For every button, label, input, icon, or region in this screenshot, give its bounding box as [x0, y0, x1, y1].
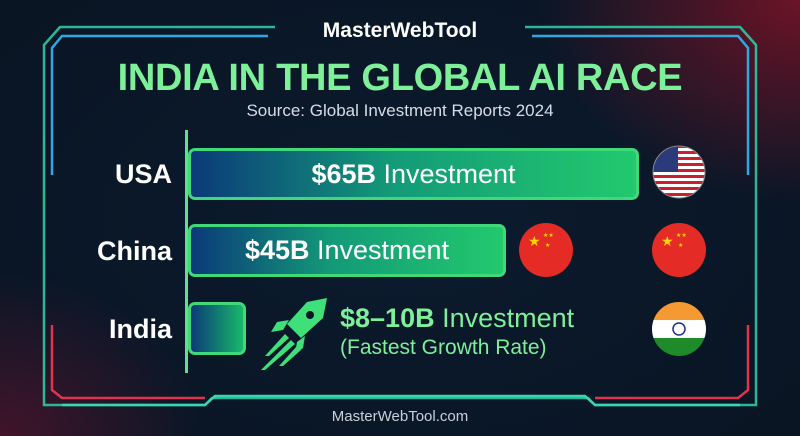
label India: India	[109, 314, 172, 344]
icon: China flag 2: ★★	[676, 232, 687, 239]
bar China: Investment	[317, 235, 449, 265]
brand heading: MasterWebTool	[323, 19, 477, 42]
bar USA	[188, 148, 639, 200]
icon: China flag 2: ★	[678, 242, 683, 249]
India text: $8–10B Investment	[340, 303, 574, 333]
label China: China	[97, 236, 172, 266]
India text	[340, 303, 574, 359]
icon: India flag	[652, 302, 706, 356]
label USA: USA	[115, 159, 172, 189]
row: USA	[115, 146, 706, 200]
bar China	[188, 224, 506, 277]
bar USA: Investment	[383, 158, 516, 188]
icon: China flag 1: ★	[528, 233, 541, 249]
row: India	[109, 298, 706, 370]
footer: MasterWebTool.com	[332, 408, 468, 425]
bar USA: $65B	[311, 158, 376, 188]
icon: China flag 2	[652, 223, 706, 277]
bar India	[188, 302, 246, 355]
axis line	[185, 130, 188, 373]
bar China: $45B	[245, 235, 309, 265]
icon: China flag 2: ★	[661, 233, 674, 249]
India text: (Fastest Growth Rate)	[340, 336, 547, 359]
icon: China flag 1	[519, 223, 573, 277]
icon: rocket	[261, 298, 327, 370]
row: China	[97, 223, 706, 277]
icon: China flag 1: ★	[545, 242, 550, 249]
subtitle: source: Source: Global Investment Reports 2024	[246, 101, 554, 120]
icon: China flag 1: ★★	[543, 232, 554, 239]
icon: US flag	[652, 146, 706, 198]
title: INDIA IN THE GLOBAL AI RACE	[118, 57, 682, 99]
